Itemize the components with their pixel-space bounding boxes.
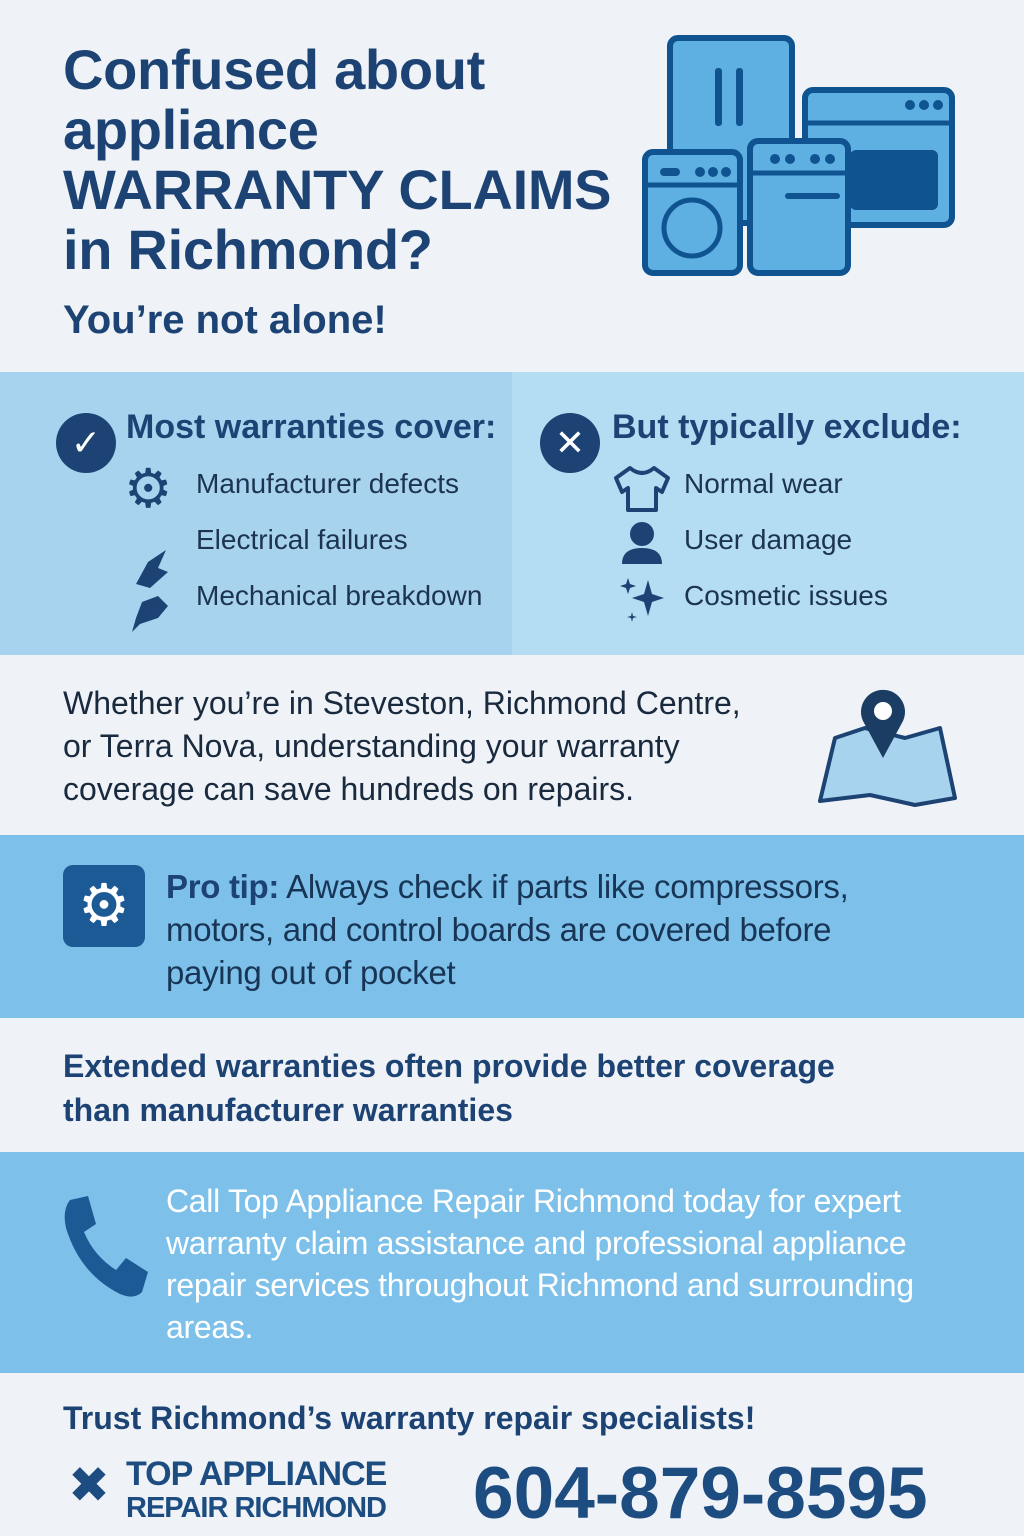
list: Normal wear — [684, 468, 843, 499]
icons — [614, 466, 670, 622]
icon: appliances — [642, 35, 955, 276]
text: Call Top Appliance Repair Richmond today for expert warranty claim assistance and professional appliance repair services throughout Richmond and surrounding areas. — [166, 1183, 914, 1345]
list — [684, 468, 888, 611]
logo — [68, 1455, 386, 1524]
list: Electrical failures — [196, 524, 408, 555]
text: Pro tip: Always check if parts like compressors, motors, and control boards are covered before paying out of pocket — [166, 868, 848, 991]
icon: gear: ⚙ — [124, 459, 172, 519]
heading: Most warranties cover: — [126, 408, 496, 446]
title — [63, 38, 611, 281]
panel: covers — [0, 372, 512, 655]
list: Cosmetic issues — [684, 580, 888, 611]
icon: x: ✕ — [555, 422, 585, 463]
subtitle: You’re not alone! — [63, 298, 387, 342]
logo: TOP APPLIANCE — [126, 1455, 386, 1493]
icon: gear box — [63, 865, 145, 947]
icon: gear box: ⚙ — [78, 873, 130, 938]
panel: pro tip — [0, 835, 1024, 1018]
tagline: Trust Richmond’s warranty repair specialists! — [63, 1400, 755, 1436]
title: WARRANTY CLAIMS — [63, 158, 611, 221]
icon: plug — [132, 550, 168, 632]
text: locations: Whether you’re in Steveston, Richmond Centre, or Terra Nova, understanding your warranty coverage can save hundreds on repairs. — [63, 685, 741, 807]
list: Mechanical breakdown — [196, 580, 482, 611]
icon: x — [540, 413, 600, 473]
panel: exclusions — [512, 372, 1024, 655]
text: extended: Extended warranties often provide better coverage than manufacturer warranties — [63, 1048, 835, 1128]
icon: phone — [64, 1196, 148, 1297]
title: Confused about — [63, 38, 485, 101]
list: Manufacturer defects — [196, 468, 459, 499]
list — [196, 468, 482, 611]
logo: REPAIR RICHMOND — [126, 1492, 386, 1524]
icon: check: ✓ — [71, 422, 101, 463]
icon: tools: ✖ — [68, 1457, 110, 1513]
title: appliance — [63, 98, 319, 161]
icon: check — [56, 413, 116, 473]
title: in Richmond? — [63, 218, 433, 281]
list: User damage — [684, 524, 852, 555]
phone number: 604-879-8595 — [473, 1453, 928, 1534]
icon: map — [818, 690, 957, 807]
heading: But typically exclude: — [612, 408, 962, 446]
panel: call — [0, 1152, 1024, 1373]
